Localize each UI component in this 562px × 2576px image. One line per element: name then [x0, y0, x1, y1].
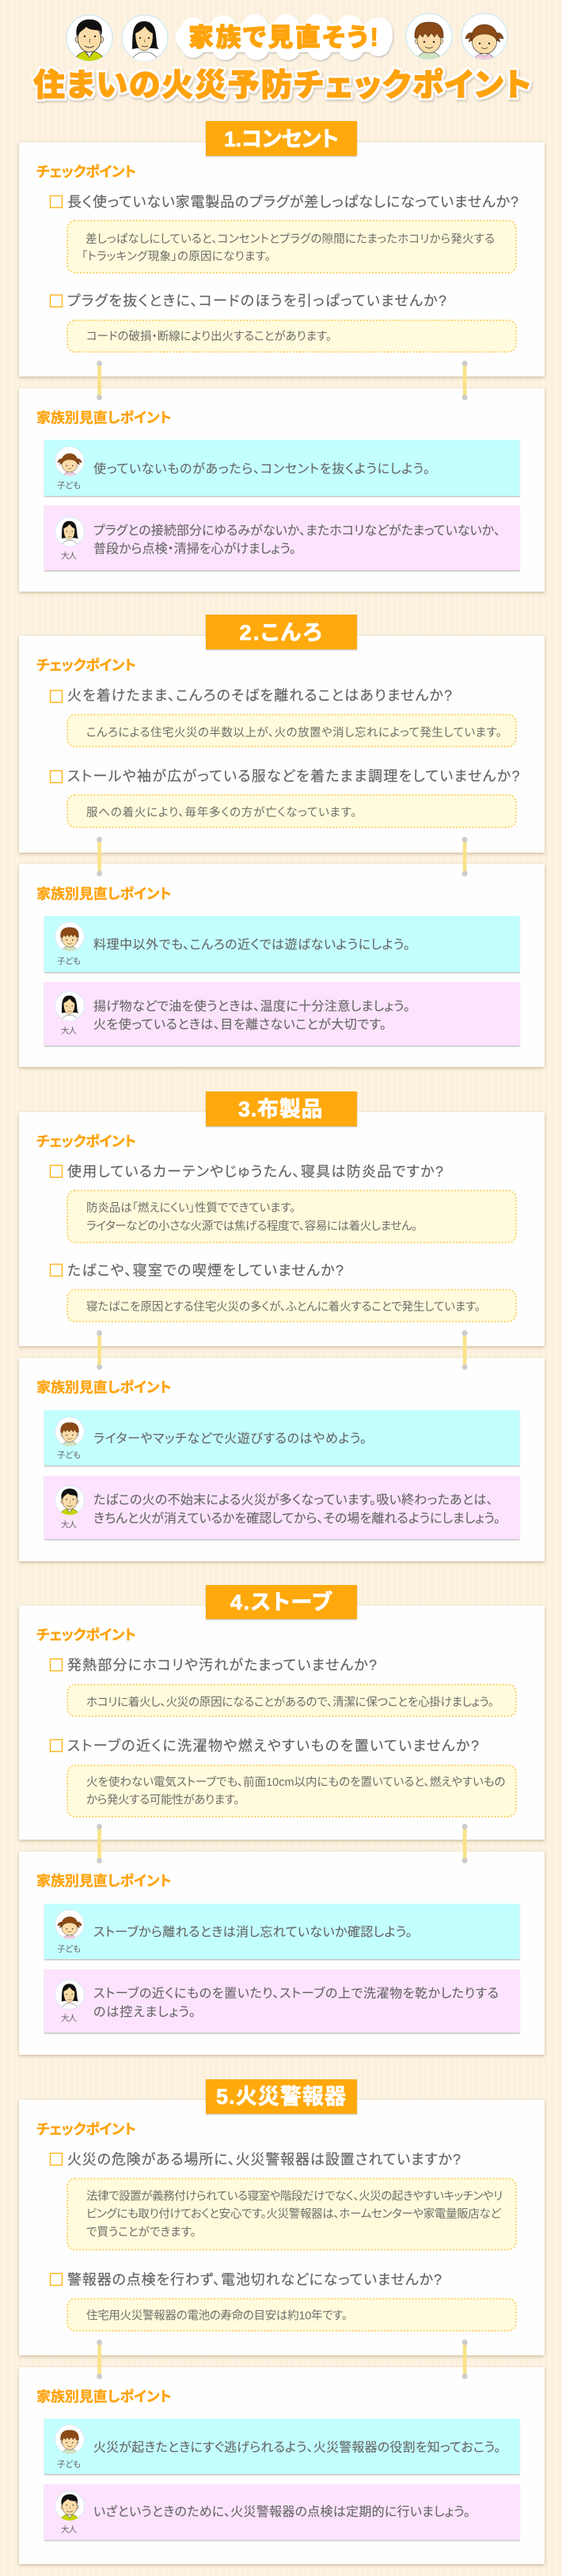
- note 2: [67, 1765, 516, 1817]
- heading: family points: 家族別見直しポイント: [36, 1873, 171, 1889]
- note 2: [67, 320, 516, 352]
- section badge: [206, 1585, 357, 1619]
- panel: check points: [19, 1606, 545, 1840]
- heading: check point: チェックポイント: [36, 1626, 136, 1644]
- section badge: [206, 2079, 357, 2113]
- section badge: [206, 615, 357, 649]
- connectors: [97, 2340, 468, 2379]
- section title: 2.こんろ: [239, 621, 321, 645]
- child tip: [44, 2419, 519, 2474]
- child tip: 子ども: [57, 2460, 81, 2469]
- note 1: [67, 715, 516, 747]
- note 1: 「トラッキング現象」の原因になります。: [82, 250, 271, 263]
- checkbox: [51, 1264, 62, 1277]
- section 3: 布製品: [19, 1091, 545, 1561]
- adult tip: 火を使っているときは、目を離さないことが大切です。: [93, 1017, 386, 1031]
- child tip: [44, 916, 519, 972]
- adult tip: 大人: [61, 550, 78, 561]
- adult tip: [44, 1476, 519, 1539]
- question 1: 火を着けたまま、こんろのそばを離れることはありませんか?: [67, 688, 452, 704]
- child tip: [44, 1410, 519, 1466]
- panel: family points: [19, 388, 545, 592]
- heading: check point: チェックポイント: [36, 2121, 136, 2137]
- adult tip: 大人: [61, 1025, 78, 1035]
- icon: boy avatar: [406, 13, 452, 60]
- checkbox: [51, 2273, 62, 2286]
- adult tip: ストーブの近くにものを置いたり、ストーブの上で洗濯物を乾かしたりする: [93, 1985, 499, 2000]
- adult tip: 大人: [61, 2013, 78, 2023]
- section title: 4.ストーブ: [230, 1590, 332, 1614]
- adult tip: きちんと火が消えているかを確認してから、その場を離れるようにしましょう。: [93, 1511, 500, 1526]
- section 2: こんろ: [19, 615, 545, 1067]
- child tip: ライターやマッチなどで火遊びするのはやめよう。: [93, 1432, 366, 1446]
- checkbox: [51, 2153, 62, 2166]
- adult tip: 揚げ物などで油を使うときは、温度に十分注意しましょう。: [93, 999, 410, 1013]
- heading: check point: チェックポイント: [36, 1133, 136, 1150]
- adult tip: 普段から点検・清掃を心がけましょう。: [93, 542, 296, 556]
- question 2: ストーブの近くに洗濯物や燃えやすいものを置いていませんか?: [67, 1737, 479, 1754]
- question 2: 警報器の点検を行わず、電池切れなどになっていませんか?: [67, 2271, 442, 2287]
- panel: check points: [19, 142, 545, 376]
- question 1: 長く使っていない家電製品のプラグが差しっぱなしになっていませんか?: [67, 195, 518, 210]
- panel: family points: [19, 1852, 545, 2055]
- note 1: で買うことができます。: [86, 2226, 196, 2239]
- adult tip: [44, 2484, 519, 2540]
- child tip: ストーブから離れるときは消し忘れていないか確認しよう。: [93, 1924, 412, 1939]
- section title: 5.火災警報器: [216, 2085, 346, 2109]
- panel: family points: [19, 864, 545, 1067]
- connectors: [97, 1824, 468, 1863]
- heading: family points: 家族別見直しポイント: [36, 886, 171, 902]
- panel: check points: [19, 1112, 545, 1346]
- adult tip: 大人: [61, 2525, 78, 2534]
- note 1: 差しっぱなしにしていると、コンセントとプラグの隙間にたまったホコリから発火する: [85, 233, 495, 246]
- heading: family points: 家族別見直しポイント: [36, 410, 171, 426]
- note 2: [67, 795, 516, 827]
- child tip: 火災が起きたときにすぐ逃げられるよう、火災警報器の役割を知っておこう。: [93, 2441, 500, 2455]
- connectors: [97, 361, 468, 400]
- section 1: コンセント: [19, 121, 545, 592]
- child tip: 子ども: [57, 481, 81, 490]
- adult tip: [44, 1969, 519, 2033]
- heading: check point: チェックポイント: [36, 163, 136, 180]
- icon: father avatar: [66, 15, 112, 62]
- child tip: 子ども: [57, 1451, 81, 1460]
- note 1: 防炎品は「燃えにくい」性質でできています。: [86, 1201, 296, 1215]
- note 2: コードの破損・断線により出火することがあります。: [86, 330, 332, 343]
- note 1: 法律で設置が義務付けられている寝室や階段だけでなく、火災の起きやすいキッチンやリ: [86, 2190, 503, 2203]
- section badge: [206, 121, 357, 156]
- child tip: 子ども: [57, 1944, 81, 1954]
- checkbox: [51, 770, 62, 783]
- subtitle: 家族で見直そう!: [188, 23, 378, 51]
- note 2: 寝たばこを原因とする住宅火災の多くが、ふとんに着火することで発生しています。: [86, 1299, 480, 1314]
- section badge: [206, 1091, 357, 1126]
- note 1: [67, 1685, 516, 1716]
- checkbox: [51, 196, 62, 207]
- checkbox: [51, 690, 62, 702]
- title: 住まいの火災予防チェックポイント: [33, 68, 531, 103]
- note 2: [67, 2298, 516, 2331]
- heading: family points: 家族別見直しポイント: [36, 1379, 171, 1395]
- child tip: [44, 1904, 519, 1959]
- adult tip: 大人: [61, 1519, 78, 1530]
- note 1: ホコリに着火し、火災の原因になることがあるので、清潔に保つことを心掛けましょう。: [86, 1696, 494, 1709]
- section title: 3.布製品: [238, 1098, 323, 1122]
- checkbox: [51, 1659, 62, 1670]
- checkbox: [51, 295, 62, 307]
- panel: family points: [19, 2367, 545, 2564]
- child tip: 料理中以外でも、こんろの近くでは遊ばないようにしよう。: [93, 937, 410, 951]
- section 4: ストーブ: [19, 1585, 545, 2055]
- adult tip: プラグとの接続部分にゆるみがないか、またホコリなどがたまっていないか、: [93, 524, 500, 538]
- note 2: 火を使わない電気ストーブでも、前面10cm以内にものを置いていると、燃えやすいもの: [86, 1775, 505, 1789]
- icon: girl avatar: [461, 13, 507, 60]
- checkbox: [51, 1166, 62, 1177]
- note 2: 服への着火により、毎年多くの方が亡くなっています。: [86, 805, 356, 819]
- connectors: [97, 1330, 468, 1370]
- question 1: 使用しているカーテンやじゅうたん、寝具は防炎品ですか?: [67, 1164, 443, 1180]
- adult tip: [44, 982, 519, 1046]
- checkbox: [51, 1740, 62, 1751]
- panel: check points: [19, 636, 545, 853]
- note 1: ビングにも取り付けておくと安心です。火災警報器は、ホームセンターや家電量販店など: [86, 2207, 502, 2221]
- question 2: たばこや、寝室での喫煙をしていませんか?: [67, 1262, 344, 1278]
- section title: 1.コンセント: [224, 127, 339, 151]
- heading: family points: 家族別見直しポイント: [36, 2389, 171, 2404]
- adult tip: [44, 505, 519, 570]
- adult tip: のは控えましょう。: [93, 2005, 196, 2019]
- child tip: 子ども: [57, 956, 81, 966]
- note 1: こんろによる住宅火災の半数以上が、火の放置や消し忘れによって発生しています。: [86, 726, 502, 740]
- question 1: 発熱部分にホコリや汚れがたまっていませんか?: [67, 1658, 377, 1674]
- question 2: プラグを抜くときに、コードのほうを引っぱっていませんか?: [67, 293, 446, 308]
- note 1: [67, 221, 516, 273]
- note 1: [67, 2178, 516, 2249]
- question 1: 火災の危険がある場所に、火災警報器は設置されていますか?: [67, 2151, 461, 2167]
- note 1: ライターなどの小さな火源では焦げる程度で、容易には着火しません。: [86, 1220, 418, 1233]
- note 1: [67, 1190, 516, 1243]
- heading: check point: チェックポイント: [36, 656, 136, 674]
- section 5: 火災警報器: [19, 2079, 545, 2564]
- connectors: [97, 837, 468, 876]
- child tip: [44, 440, 519, 496]
- panel: family points: [19, 1358, 545, 1561]
- note 2: 住宅用火災警報器の電池の寿命の目安は約10年です。: [86, 2309, 347, 2323]
- header: [33, 13, 531, 103]
- note 2: [67, 1290, 516, 1322]
- panel: check points: [19, 2100, 545, 2355]
- question 2: ストールや袖が広がっている服などを着たまま調理をしていませんか?: [67, 769, 519, 785]
- child tip: 使っていないものがあったら、コンセントを抜くようにしよう。: [93, 462, 430, 476]
- icon: mother avatar: [122, 15, 168, 62]
- note 2: から発火する可能性があります。: [86, 1794, 239, 1807]
- adult tip: たばこの火の不始末による火災が多くなっています。吸い終わったあとは、: [93, 1492, 493, 1507]
- adult tip: いざというときのために、火災警報器の点検は定期的に行いましょう。: [93, 2504, 470, 2519]
- cloud bubble: [176, 14, 393, 60]
